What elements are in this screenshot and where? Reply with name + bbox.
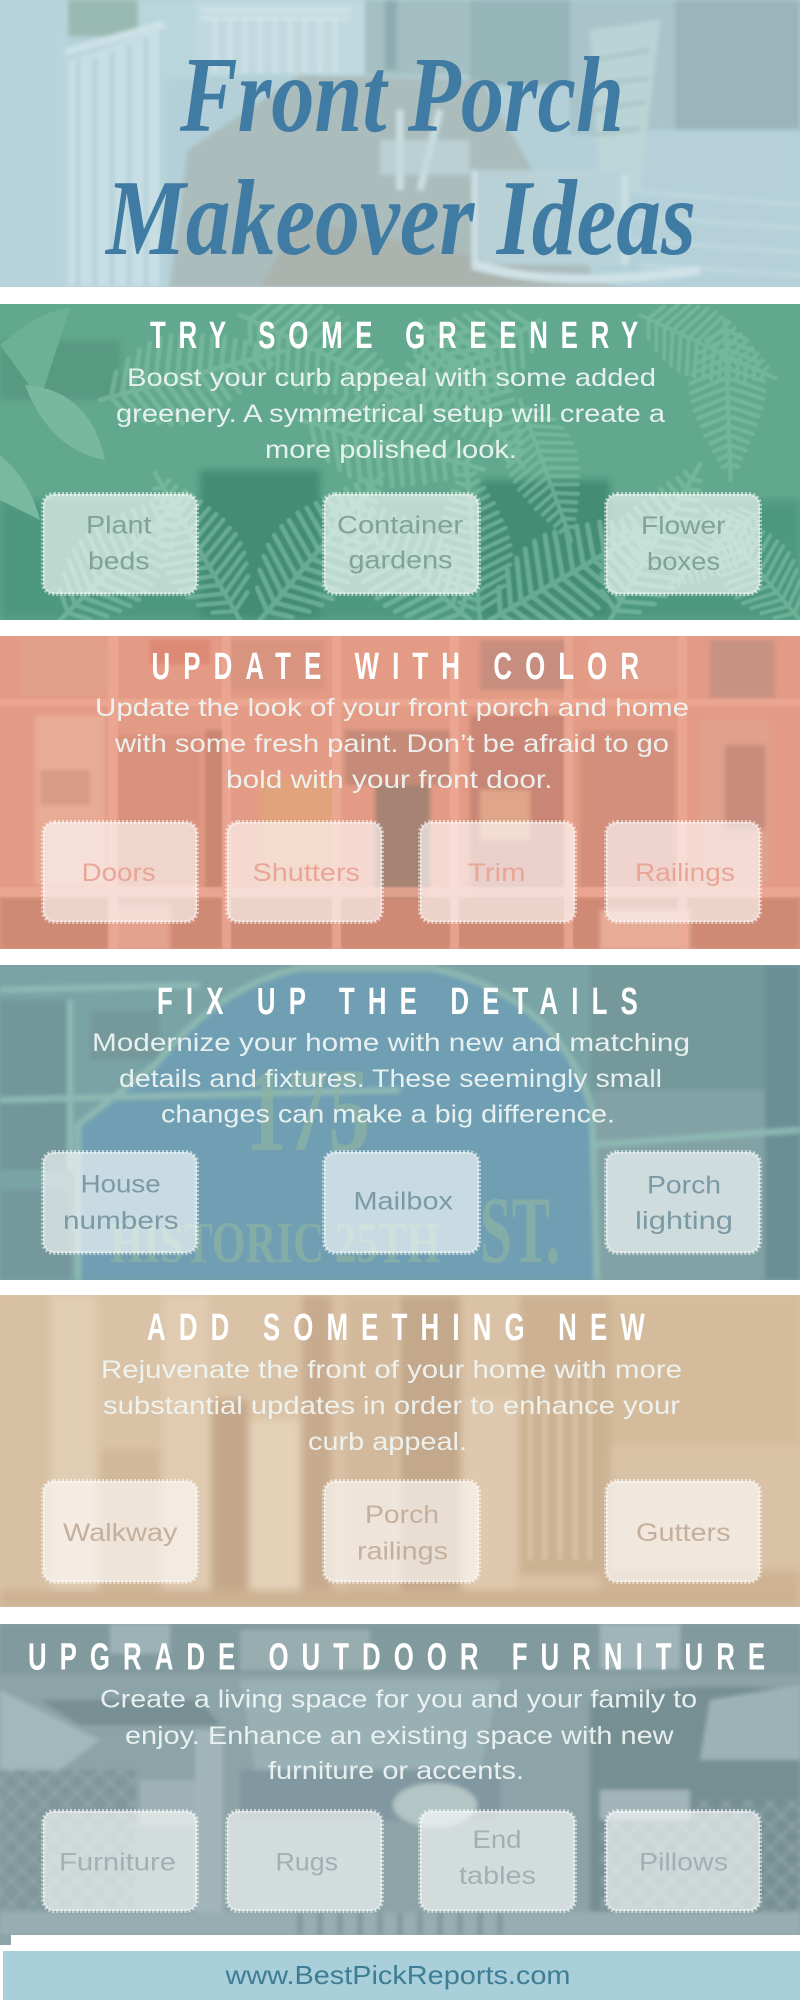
item: railings: Railings (635, 859, 735, 887)
item: porch lighting: Porch (647, 1172, 721, 1200)
panel: update with color (0, 636, 800, 949)
plaque lettering in the photo (110, 1043, 560, 1283)
plaque lettering in the photo: ST. (480, 1177, 560, 1283)
plaque lettering in the photo: 175 (245, 1043, 370, 1176)
item: railings (606, 822, 760, 922)
hero panel (0, 0, 800, 287)
item: end tables: tables (459, 1862, 536, 1890)
footer (3, 1951, 800, 2000)
title: Front Porch (179, 36, 624, 155)
item: house numbers: House (81, 1171, 161, 1199)
item: trim: Trim (468, 859, 526, 887)
body text (95, 694, 689, 794)
item: walkway (43, 1481, 197, 1582)
item: container gardens (324, 494, 479, 594)
painted houses photo background (0, 636, 800, 949)
body text: details and fixtures. These seemingly small (119, 1065, 662, 1093)
item: furniture: Furniture (59, 1849, 176, 1877)
item: pillows (606, 1811, 760, 1911)
item: flower boxes: boxes (647, 548, 720, 576)
body text: Boost your curb appeal with some added (127, 364, 656, 392)
item: porch lighting (606, 1152, 760, 1253)
item: mailbox: Mailbox (354, 1188, 454, 1216)
title: Makeover Ideas (104, 159, 696, 278)
body text: with some fresh paint. Don’t be afraid to go (114, 730, 669, 758)
item: doors (43, 822, 197, 922)
item: shutters: Shutters (252, 859, 360, 887)
wicker furniture photo background (0, 1624, 800, 1935)
item: house numbers: numbers (63, 1207, 179, 1235)
item: plant beds (43, 494, 197, 594)
body text: changes can make a big difference. (161, 1100, 615, 1128)
body text: greenery. A symmetrical setup will create a (116, 400, 665, 428)
heading: upgrade outdoor furniture: UPGRADE OUTDOOR FURNITURE (28, 1636, 765, 1678)
fern photo background (0, 304, 800, 620)
item: flower boxes: Flower (641, 512, 726, 540)
body text: curb appeal. (308, 1428, 467, 1456)
item: end tables (420, 1811, 575, 1911)
item: mailbox (324, 1152, 479, 1253)
item: porch lighting: lighting (635, 1207, 733, 1235)
item: porch railings: railings (357, 1538, 448, 1566)
plaque lettering in the photo: HISTORIC 25TH (110, 1210, 440, 1275)
hero photo: porch with rocking chairs (0, 0, 800, 287)
photo notch at bottom left (0, 1935, 11, 1945)
item: end tables: End (472, 1826, 522, 1854)
body text (92, 1029, 690, 1128)
body text: bold with your front door. (226, 766, 552, 794)
heading: add something new: ADD SOMETHING NEW (147, 1306, 645, 1348)
item: trim (420, 822, 575, 922)
item: porch railings (324, 1481, 479, 1582)
body text: furniture or accents. (268, 1757, 524, 1785)
footer website address: www.BestPickReports.com (224, 1960, 570, 1990)
body text: Update the look of your front porch and home (95, 694, 689, 722)
body text: enjoy. Enhance an existing space with new (125, 1722, 675, 1750)
item: flower boxes (606, 494, 760, 594)
heading: try some greenery: TRY SOME GREENERY (150, 314, 639, 356)
item: walkway: Walkway (63, 1519, 178, 1547)
item: furniture (43, 1811, 197, 1911)
panel: upgrade outdoor furniture (0, 1624, 800, 1945)
item: container gardens: gardens (348, 547, 452, 575)
panel: try some greenery (0, 304, 800, 620)
body text (100, 1686, 697, 1785)
address plaque photo background (0, 965, 800, 1280)
body text: more polished look. (265, 436, 517, 464)
item: shutters (227, 822, 382, 922)
title (104, 36, 696, 278)
panel: fix up the details (0, 965, 800, 1283)
body text: Modernize your home with new and matching (92, 1029, 690, 1057)
body text: substantial updates in order to enhance your (103, 1392, 680, 1420)
item: pillows: Pillows (639, 1849, 728, 1877)
item: gutters: Gutters (636, 1519, 731, 1547)
item: rugs: Rugs (276, 1849, 338, 1877)
item: plant beds: Plant (86, 512, 152, 540)
item: house numbers (43, 1152, 197, 1253)
body text: Create a living space for you and your family to (100, 1686, 697, 1714)
item: doors: Doors (82, 859, 156, 887)
panel: add something new (0, 1295, 800, 1607)
body text (101, 1356, 682, 1456)
item: container gardens: Container (337, 512, 463, 540)
heading: update with color: UPDATE WITH COLOR (152, 645, 639, 687)
heading: fix up the details: FIX UP THE DETAILS (157, 980, 638, 1022)
body text: Rejuvenate the front of your home with more (101, 1356, 682, 1384)
item: porch railings: Porch (365, 1501, 439, 1529)
body text (116, 364, 665, 464)
item: plant beds: beds (88, 548, 150, 576)
item: gutters (606, 1481, 760, 1582)
porch balusters photo background (0, 1295, 800, 1607)
item: rugs (227, 1811, 382, 1911)
